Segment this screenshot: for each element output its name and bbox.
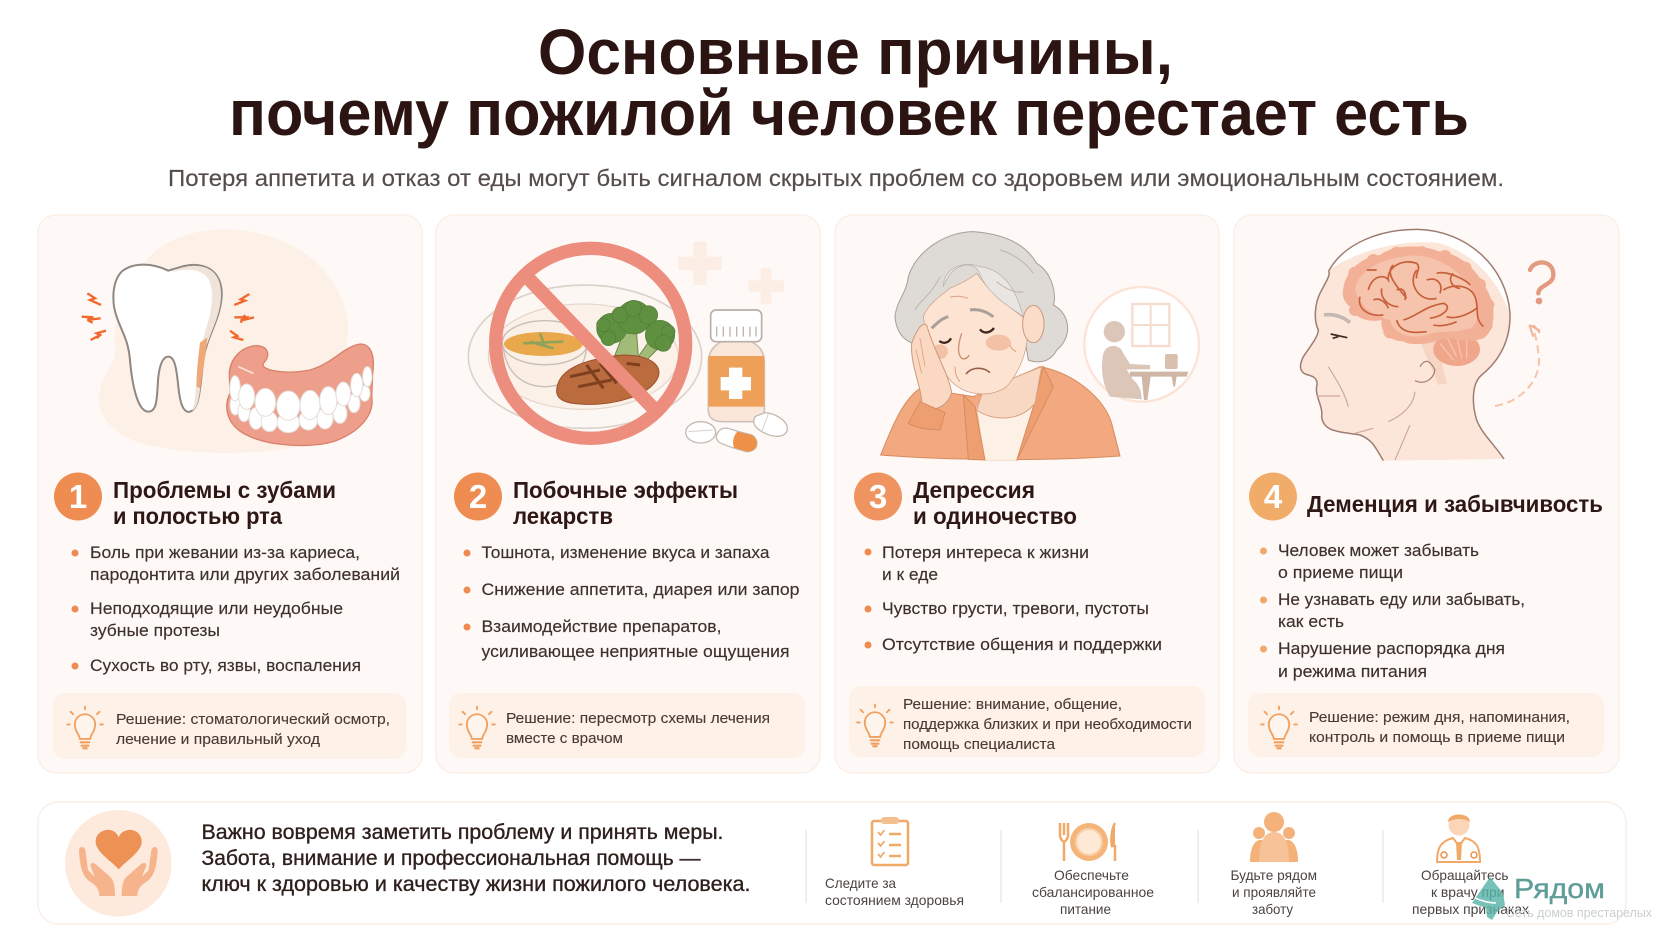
- tip: monitor health: [825, 817, 964, 908]
- tip: balanced nutrition: Обеспечьте: [1054, 867, 1129, 883]
- bullet list: Нарушение распорядка дня: [1278, 639, 1505, 658]
- illustration: tooth and dentures: [82, 229, 373, 453]
- tip: balanced nutrition: питание: [1060, 901, 1111, 917]
- bullet list: пародонтита или других заболеваний: [90, 565, 400, 584]
- bullet list: о приеме пищи: [1278, 563, 1403, 582]
- solution box: [849, 686, 1205, 757]
- tip: see a doctor: к врачу при: [1431, 884, 1504, 900]
- tip: see a doctor: первых признаках: [1412, 901, 1529, 917]
- solution box: контроль и помощь в приеме пищи: [1309, 729, 1565, 746]
- tip: be there and care: заботу: [1252, 901, 1293, 917]
- bullet list: Человек может забывать: [1278, 541, 1479, 560]
- icon: doctor: [1437, 814, 1480, 862]
- bullet list: усиливающее неприятные ощущения: [482, 642, 790, 661]
- number badge 2: [454, 472, 502, 520]
- solution box: вместе с врачом: [506, 730, 623, 747]
- tip: be there and care: [1230, 812, 1317, 917]
- icon: people group: [1250, 812, 1298, 862]
- tip: monitor health: Следите за: [825, 875, 896, 891]
- tip: see a doctor: [1412, 814, 1529, 917]
- number badge 2: 2: [469, 478, 487, 515]
- solution box: Решение: внимание, общение,: [903, 696, 1122, 713]
- bullet list: [864, 543, 1162, 654]
- bullet list: Боль при жевании из-за кариеса,: [90, 543, 360, 562]
- tip: be there and care: и проявляйте: [1232, 884, 1316, 900]
- heading: и полостью рта: [113, 503, 282, 529]
- tip: balanced nutrition: [1032, 823, 1154, 917]
- solution box: Решение: пересмотр схемы лечения: [506, 710, 770, 727]
- watermark logo: Сеть домов престарелых: [1506, 905, 1652, 920]
- heading: Депрессия: [913, 477, 1035, 503]
- number badge 3: [854, 472, 902, 520]
- watermark logo: Рядом: [1514, 873, 1605, 904]
- call to action text: [202, 821, 750, 896]
- bullet list: Не узнавать еду или забывать,: [1278, 590, 1525, 609]
- heading: Деменция и забывчивость: [1307, 491, 1603, 517]
- call to action text: ключ к здоровью и качеству жизни пожилого человека.: [202, 873, 750, 896]
- heading: Проблемы с зубами: [113, 477, 336, 503]
- icon: clipboard: [872, 817, 908, 865]
- panel: depression and loneliness: [835, 215, 1219, 773]
- bullet list: [72, 543, 400, 675]
- call to action text: Забота, внимание и профессиональная помощь —: [202, 847, 700, 870]
- solution box: помощь специалиста: [903, 736, 1056, 753]
- bullet list: Отсутствие общения и поддержки: [882, 635, 1162, 654]
- panel: medication side effects: [436, 215, 820, 773]
- panel: dementia and forgetfulness: [1234, 215, 1619, 773]
- illustration: head profile with brain: [1301, 229, 1553, 461]
- tip: monitor health: состоянием здоровья: [825, 892, 964, 908]
- illustration: sad elderly woman: [881, 232, 1199, 461]
- number badge 3: 3: [869, 478, 887, 515]
- panel: bottom call to action: [38, 802, 1626, 924]
- solution box: [53, 693, 406, 759]
- heading: [113, 477, 336, 529]
- panel: teeth problems: [38, 215, 422, 773]
- title: [229, 16, 1469, 149]
- heading: [513, 477, 738, 529]
- tip: see a doctor: Обращайтесь: [1421, 867, 1508, 883]
- number badge 4: [1249, 472, 1297, 520]
- bullet list: зубные протезы: [90, 621, 220, 640]
- tip: be there and care: Будьте рядом: [1230, 867, 1317, 883]
- bullet list: и режима питания: [1278, 662, 1427, 681]
- heading: и одиночество: [913, 503, 1077, 529]
- tip: balanced nutrition: сбалансированное: [1032, 884, 1154, 900]
- title: почему пожилой человек перестает есть: [229, 77, 1469, 149]
- watermark logo: [1472, 873, 1652, 920]
- solution box: Решение: стоматологический осмотр,: [116, 711, 390, 728]
- bullet list: как есть: [1278, 612, 1344, 631]
- heading: лекарств: [513, 503, 613, 529]
- bullet list: Снижение аппетита, диарея или запор: [482, 580, 800, 599]
- solution box: [1248, 693, 1604, 757]
- icon: plate with fork and knife: [1060, 823, 1115, 861]
- subtitle: Потеря аппетита и отказ от еды могут быть сигналом скрытых проблем со здоровьем или эмоциональным состоянием.: [168, 165, 1504, 191]
- solution box: поддержка близких и при необходимости: [903, 716, 1192, 733]
- bullet list: Тошнота, изменение вкуса и запаха: [482, 543, 770, 562]
- illustration: banned food and pills: [468, 242, 787, 452]
- title: Основные причины,: [538, 16, 1173, 88]
- heading: Побочные эффекты: [513, 477, 738, 503]
- solution box: лечение и правильный уход: [116, 731, 320, 748]
- bullet list: Сухость во рту, язвы, воспаления: [90, 656, 361, 675]
- bullet list: Потеря интереса к жизни: [882, 543, 1089, 562]
- bullet list: и к еде: [882, 565, 938, 584]
- heading: [913, 477, 1077, 529]
- number badge 1: [54, 472, 102, 520]
- bullet list: Чувство грусти, тревоги, пустоты: [882, 599, 1149, 618]
- bullet list: Неподходящие или неудобные: [90, 599, 343, 618]
- call to action text: Важно вовремя заметить проблему и принять меры.: [202, 821, 724, 844]
- bullet list: Взаимодействие препаратов,: [482, 617, 722, 636]
- icon: hands holding heart: [65, 810, 172, 917]
- number badge 4: 4: [1264, 478, 1283, 515]
- number badge 1: 1: [69, 478, 87, 515]
- solution box: Решение: режим дня, напоминания,: [1309, 709, 1570, 726]
- solution box: [449, 693, 805, 758]
- bullet list: [1260, 541, 1525, 681]
- bullet list: [464, 543, 800, 661]
